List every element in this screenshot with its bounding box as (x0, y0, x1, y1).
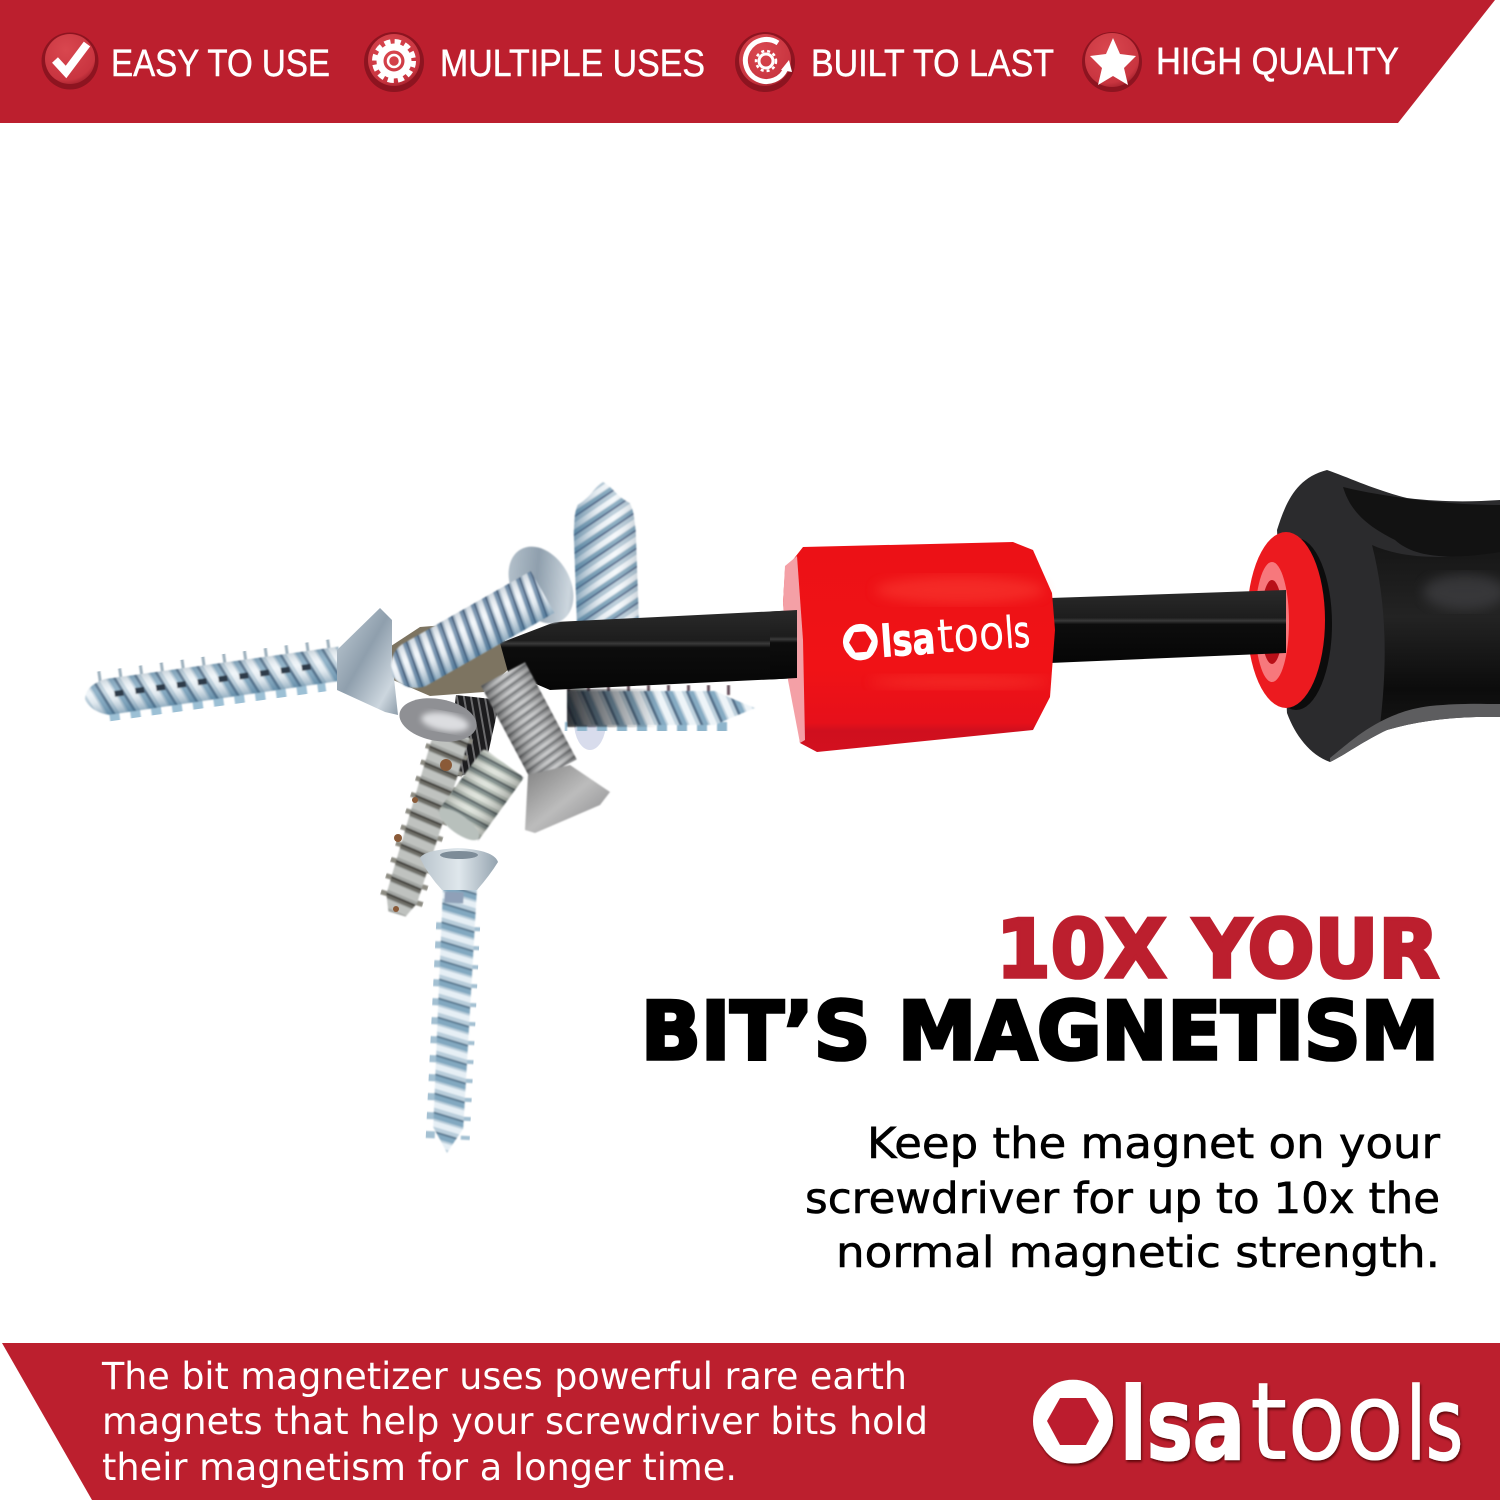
body copy: normal magnetic strength. (836, 1228, 1440, 1278)
body copy (805, 1119, 1440, 1278)
lower grip band (1330, 704, 1500, 762)
upper grip recess (1343, 487, 1500, 556)
brand logo: lsa (1120, 1366, 1245, 1483)
grip body (1372, 545, 1500, 725)
screw: right horizontal (565, 689, 755, 727)
feature: high quality (1082, 32, 1399, 92)
grip highlight (1423, 574, 1500, 610)
bolt: short zinc (434, 748, 524, 846)
dark threaded bolt behind (446, 695, 500, 778)
tarnished fragment (388, 625, 510, 696)
product photo: screws on magnetized screwdriver (82, 470, 1500, 1154)
red collar (1247, 532, 1325, 708)
label: high quality: HIGH QUALITY (1156, 41, 1399, 83)
headline line 1: 10X YOUR (996, 903, 1439, 996)
feature: multiple uses (364, 32, 705, 92)
pan head (396, 693, 480, 747)
icon: gear with circular arrow (735, 32, 795, 92)
bottom description: their magnetism for a longer time. (102, 1446, 737, 1489)
brand logo: ls (1406, 1366, 1463, 1483)
screw: rusty (380, 727, 470, 919)
body copy: Keep the magnet on your (867, 1119, 1440, 1169)
feature: easy to use (42, 32, 330, 90)
screw: diagonal round head (381, 535, 587, 698)
magnet logo: ls (1003, 608, 1032, 659)
label: easy to use: EASY TO USE (111, 43, 330, 85)
magnet highlights (875, 576, 1045, 604)
brand logo: O (1033, 1362, 1113, 1487)
icon: check mark (42, 32, 98, 90)
headline line 2: BIT’S MAGNETISM (641, 985, 1439, 1078)
washer behind bolts (574, 694, 606, 750)
feature: built to last (735, 32, 1054, 92)
label: multiple uses: MULTIPLE USES (440, 43, 705, 85)
screw: upper vertical (572, 481, 639, 623)
bottom description (101, 1355, 928, 1489)
screw: left horizontal (82, 608, 398, 720)
magnet end face (783, 556, 805, 743)
top banner (0, 0, 1495, 123)
rust spots (393, 759, 452, 912)
headline (641, 903, 1439, 1078)
bottom description: magnets that help your screwdriver bits hold (102, 1400, 928, 1443)
bottom banner (2, 1343, 1500, 1500)
brand logo (1033, 1360, 1463, 1487)
magnet logo: too (935, 605, 1006, 665)
magnet logo: O (841, 615, 880, 672)
collar shadow (1260, 538, 1332, 710)
bolt: gray machine screw (481, 662, 610, 833)
label: built to last: BUILT TO LAST (811, 43, 1054, 85)
screw: long vertical (420, 848, 498, 1154)
bit entering magnet (770, 610, 797, 680)
red magnetizer (770, 542, 1055, 752)
screwdriver bit: left section (500, 610, 800, 690)
screwdriver handle (1277, 470, 1500, 762)
icon: gear (364, 32, 424, 92)
brand logo: too (1250, 1360, 1404, 1485)
icon: star (1082, 32, 1142, 92)
magnet logo: lsa (879, 614, 937, 668)
bottom description: The bit magnetizer uses powerful rare earth (101, 1355, 907, 1398)
body copy: screwdriver for up to 10x the (805, 1174, 1440, 1224)
screwdriver bit: right section (1050, 590, 1286, 663)
magnet logo (841, 604, 1032, 672)
